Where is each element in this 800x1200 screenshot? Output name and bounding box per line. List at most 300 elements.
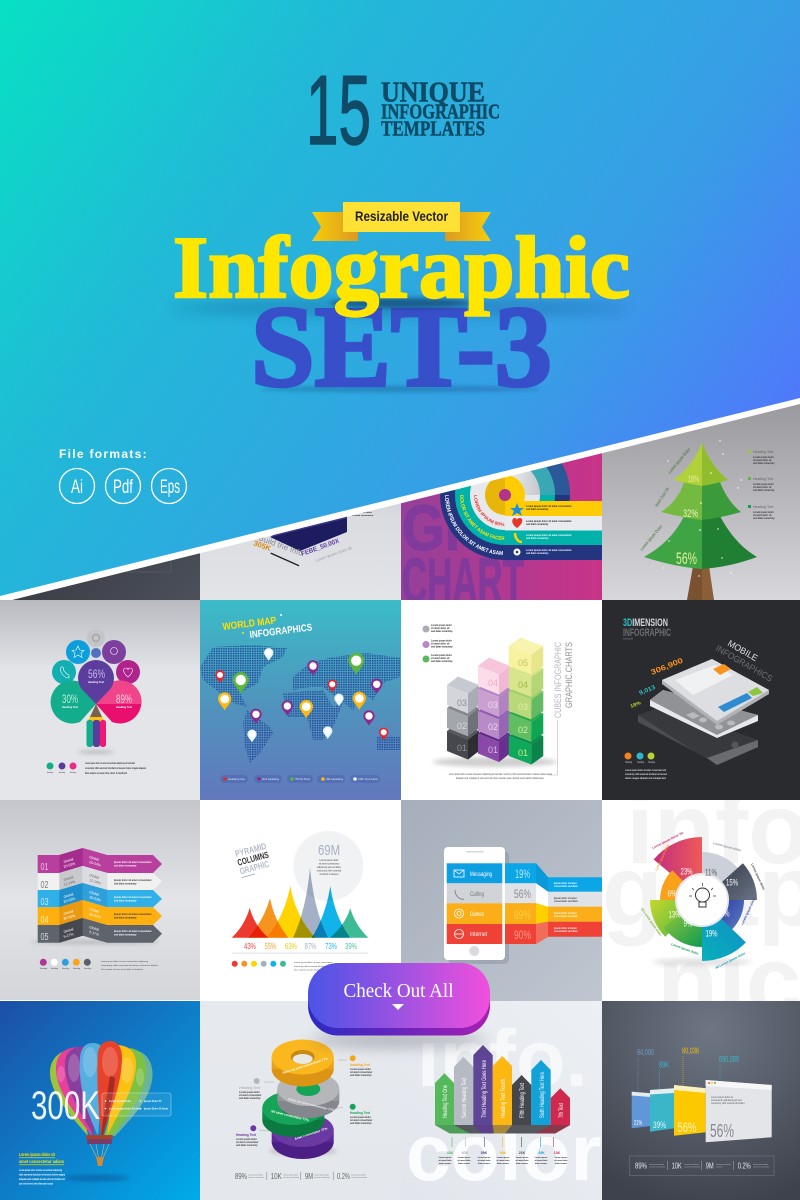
map pins <box>215 648 388 742</box>
panel: world map <box>200 600 401 800</box>
percentages: 32% <box>683 508 698 520</box>
ribbon 2 <box>38 866 162 890</box>
pyramid title: PYRAMID <box>234 841 268 859</box>
ribbon fold labels: 5-17% <box>89 930 100 937</box>
arrows <box>435 1045 570 1125</box>
highlight circle: tincidunt ut laoreet <box>320 873 339 876</box>
layers copy: dolore magna aliquam erat volutpat wisi <box>625 777 666 780</box>
map legend <box>220 775 380 783</box>
ribbon fold labels: 5-17% <box>63 932 74 939</box>
panel: folded ribbons <box>0 800 200 1000</box>
panel: arrow columns <box>401 1001 602 1200</box>
ribbon text: sed diam nonummy <box>114 864 137 868</box>
balloon copy <box>19 1169 66 1186</box>
ribbon text: sed diam nonummy <box>114 882 137 886</box>
vertical title <box>553 642 574 718</box>
headline shadow between words <box>330 298 470 308</box>
floor <box>435 1125 570 1134</box>
window percentages: 56% <box>710 1121 734 1141</box>
layer stats: 9,013 <box>639 685 657 697</box>
legend: sit amet dolor sit <box>753 486 772 489</box>
sectors <box>650 837 757 961</box>
arrow labels: Sixth Heading Text Here <box>540 1072 546 1118</box>
petal labels: 30% <box>62 692 78 706</box>
highlight circle: 69M <box>318 842 340 859</box>
cube numbers: 03 <box>457 698 467 708</box>
sector percentages: 19% <box>706 928 718 938</box>
ribbon numbers: 01 <box>40 862 49 873</box>
cube numbers: 04 <box>488 678 498 688</box>
peaks <box>232 868 368 938</box>
arrow values <box>446 1152 560 1154</box>
row text: Lorem ipsum dolor sit amet consectetur <box>526 505 572 508</box>
ribbon legend: Heading <box>51 968 58 970</box>
arrow copy: Lorem ipsum <box>535 1157 547 1159</box>
stats box: 0.2% <box>738 1160 751 1170</box>
ribbon text: sed diam nonummy <box>114 916 137 920</box>
map legend: Third Text <box>295 777 310 781</box>
ribbon captions: Ipsum dolor sit amet <box>554 912 577 915</box>
ribbon text: Ipsum dolor sit amet consectetur <box>114 861 152 864</box>
petal labels: Heading Text <box>116 705 132 709</box>
ring stats: Lorem ipsum dolor <box>314 1174 329 1176</box>
row icons <box>510 503 524 556</box>
ribbon text: sed diam nonummy <box>114 900 137 902</box>
window percentages: 21% <box>634 1120 642 1127</box>
petal labels: 89% <box>116 692 132 706</box>
mobile infographics title: INFOGRAPHICS <box>714 643 774 684</box>
ribbon 3 <box>38 883 162 907</box>
ring stats: 10K <box>271 1171 282 1181</box>
file formats: File formats: <box>59 447 148 461</box>
callouts: sed diam nonummy <box>239 1098 261 1100</box>
ribbon text: Ipsum dolor sit amet consectetur <box>114 879 152 882</box>
panel: browser windows <box>602 1001 800 1200</box>
ring stats: 0.2% <box>337 1171 350 1181</box>
ring stats: Lorem ipsum dolor <box>248 1174 263 1176</box>
menu labels: Messaging <box>470 871 492 878</box>
ribbon text: Ipsum dolor sit amet consectetur <box>114 913 152 916</box>
row text: Lorem ipsum dolor sit amet consectetur <box>526 549 572 552</box>
balloon gores <box>50 1041 153 1136</box>
badge: Eps: Eps <box>160 477 180 498</box>
pyramid copy <box>294 961 333 972</box>
top screen layer <box>662 659 769 725</box>
stats box: 10K <box>672 1160 682 1170</box>
ring captions: Dolor sit amet consectetur 77% <box>288 1097 335 1112</box>
sector labels: Lorem ipsum dolor <box>654 843 670 871</box>
sector percentages: 15% <box>726 878 738 888</box>
petal labels: Heading Text <box>88 680 104 684</box>
sector percentages: 6% <box>668 888 676 898</box>
ribbons out of phone <box>505 863 602 944</box>
gray ring <box>277 1072 339 1118</box>
ribbon captions: Ipsum dolor sit amet <box>554 897 577 900</box>
ribbon captions: consectetur sed diam <box>554 885 578 888</box>
window percentages <box>634 1119 734 1141</box>
panel: mobile layers <box>602 600 800 800</box>
arrow copy: sit amet dolor <box>438 1159 452 1162</box>
layers copy: Lorem ipsum dolor sit amet consectetur elit <box>625 769 666 772</box>
column 2 cubes <box>478 658 510 762</box>
glass info box: Lorem Ipsum Dolor <box>109 1100 131 1103</box>
vertical title: CUBES INFOGRAPHIC <box>553 642 563 718</box>
row text: Lorem ipsum dolor sit amet consectetur <box>526 534 572 537</box>
big petals <box>51 660 142 724</box>
ribbon fold labels: Global <box>89 873 100 880</box>
ribbon text <box>114 861 152 936</box>
body copy <box>85 762 146 775</box>
headline: SET-3: SET-3 <box>251 284 552 412</box>
balloon copy: nibh euismod tincidunt ut laoreet dolore magna <box>19 1174 66 1176</box>
callouts: Lorem ipsum dolor <box>239 1092 260 1094</box>
rotated tier labels <box>639 447 692 552</box>
cube numbers: 02 <box>518 725 528 735</box>
small icon circles <box>52 629 140 684</box>
ring captions <box>271 1056 335 1141</box>
300K stat: 300K <box>31 1084 100 1128</box>
ribbon text: Ipsum dolor sit amet consectetur <box>114 930 152 933</box>
ring stats: sit amet consectetur <box>283 1176 299 1179</box>
menu percentages <box>514 867 531 942</box>
layers legend <box>624 752 656 764</box>
stats box: 89% <box>635 1160 647 1170</box>
ribbon 5 <box>38 918 162 943</box>
arrow copy: Lorem ipsum <box>458 1157 470 1159</box>
ring stats: 89% <box>235 1171 247 1181</box>
purple ring <box>272 1113 334 1159</box>
arrow copy: Lorem ipsum <box>478 1157 490 1159</box>
ribbon fold labels: Global <box>89 890 100 897</box>
arc labels: LOREM IPSUM DOLOR SIT AMET ASAM <box>445 495 503 555</box>
button: check out all: Check Out All <box>344 980 454 1002</box>
arrow copy: sit amet dolor <box>554 1159 568 1162</box>
percentages: 43% <box>244 942 256 951</box>
callouts: sit amet consectetur <box>350 1119 372 1122</box>
body copy: nonummy nibh euismod tincidunt ut laoreet dolore magna aliquam <box>85 767 146 770</box>
cube numbers: 01 <box>488 745 498 755</box>
balloon highlights <box>57 1047 144 1086</box>
ribbon fold labels: Global <box>63 909 74 916</box>
ribbon copy: nonummy nibh euismod tincidunt ut laoreet dolore <box>101 964 159 967</box>
background words: CHART <box>402 545 524 617</box>
pyramid title: COLUMNS <box>236 850 270 868</box>
stat labels <box>637 1046 739 1070</box>
title: 15 unique infographic templates: UNIQUE <box>381 78 485 108</box>
ribbon fold labels: Global <box>63 892 74 899</box>
panel: dark dashboard thumbnail <box>12 553 200 600</box>
cube numbers: 01 <box>457 743 467 753</box>
petal labels <box>62 667 132 709</box>
ribbon fold labels: 80-92% <box>63 914 76 921</box>
ribbon fold labels: 20-53% <box>89 895 101 902</box>
body copy: Duis autem vel eum iriure dolor in hendrerit <box>85 772 127 775</box>
title: 15 unique infographic templates: 15 <box>306 55 371 165</box>
ribbon numbers: 05 <box>40 932 49 943</box>
rotated tier labels: Ipsum Dolor Sit <box>654 486 670 508</box>
ribbon fold labels: Global <box>63 875 74 882</box>
arrow copy: diam nonum <box>516 1163 528 1165</box>
ribbon numbers: 03 <box>40 897 49 908</box>
petal labels: 56% <box>88 667 105 681</box>
badge: Ai: Ai <box>71 477 83 498</box>
layers copy <box>625 769 667 780</box>
sector labels: Lorem ipsum dolor <box>740 897 756 925</box>
window copy: consectetur adipiscing elit sed <box>711 1099 742 1102</box>
stats box: sit amet <box>716 1166 723 1168</box>
panel: isometric box thumbnail: sit amet consectetur <box>352 514 373 517</box>
sector percentages: 9% <box>684 918 692 928</box>
ribbon fold labels: 12-19% <box>63 880 76 887</box>
highlight circle: adipiscing elit sed diam <box>317 866 341 869</box>
menu percentages: 56% <box>514 887 531 901</box>
ribbon fold labels: Global <box>89 907 100 914</box>
panel: pyramid columns <box>200 800 401 1001</box>
sector labels <box>640 830 766 970</box>
mobile infographics title: MOBILE <box>726 638 760 663</box>
callouts: sit amet consectetur <box>236 1141 258 1144</box>
ring stats: Lorem ipsum dolor <box>283 1174 298 1176</box>
ring stats: sit amet consectetur <box>351 1176 367 1179</box>
arrow values: 89K <box>481 1151 488 1155</box>
ring stats <box>235 1171 367 1181</box>
panel: isometric box thumbnail: Lorem ipsum dolor sit <box>315 545 353 563</box>
cube legend: sed diam nonummy <box>431 631 453 633</box>
keypad layer <box>650 690 758 738</box>
sector labels: Lorem Ipsum Dolor Sit <box>652 830 685 850</box>
leader lines <box>638 1056 720 1091</box>
menu percentages: 90% <box>514 928 531 942</box>
panel: phone menu <box>401 800 602 1001</box>
ring stats: sit amet consectetur <box>314 1176 330 1179</box>
cube numbers: 02 <box>457 721 467 731</box>
arrow copy <box>438 1157 568 1165</box>
cube legend <box>422 625 453 663</box>
glass info box: Ipsum Dolor 54 <box>144 1100 162 1103</box>
row text: sed diam nonummy <box>526 523 549 526</box>
percentages: 87% <box>304 942 316 951</box>
legend: Heading Text <box>753 477 773 481</box>
ribbon fold labels <box>63 855 101 939</box>
panel: sector chart <box>606 800 800 1001</box>
ribbon: resizable vector <box>312 202 491 241</box>
ribbon captions: Ipsum dolor sit amet <box>554 882 577 885</box>
rotated tier labels: Lorem Ipsum Dolor <box>667 447 692 475</box>
ribbon copy: Lorem ipsum dolor sit amet consectetur adipiscing <box>101 960 149 963</box>
stats box: sit amet consectetur <box>753 1166 769 1168</box>
background lettering <box>409 1028 600 1181</box>
legend dots <box>46 762 76 774</box>
ribbon text: sed diam nonummy <box>114 934 137 936</box>
ribbon captions: Ipsum dolor sit amet <box>554 927 577 930</box>
layers legend: Heading <box>648 762 656 764</box>
percentages: 73% <box>325 942 337 951</box>
window copy <box>711 1096 745 1105</box>
arrow copy: Lorem ipsum <box>516 1157 528 1159</box>
ring stats: 9M <box>305 1171 313 1181</box>
arrow values: 67K <box>462 1151 469 1155</box>
legend dots: Heading <box>59 772 65 774</box>
stats box: sit amet consectetur <box>649 1166 665 1168</box>
panel: hot air balloon <box>0 1001 200 1200</box>
glass info box: Lorem Ipsum Dolor Sit Amet <box>109 1108 141 1110</box>
ribbon text: Ipsum dolor sit amet consectetur <box>114 896 152 899</box>
legend: Lorem ipsum dolor <box>753 512 774 514</box>
highlight circle: Lorem ipsum dolor <box>319 859 339 862</box>
arrow labels: Second Heading Text <box>462 1078 468 1118</box>
drop lines <box>452 1137 554 1147</box>
sector percentages: 23% <box>680 866 692 876</box>
stats box: Lorem ipsum dolor <box>753 1164 768 1166</box>
cube numbers: 05 <box>518 658 528 668</box>
callouts: Heading Text <box>239 1086 260 1090</box>
arrow copy: diam nonum <box>535 1163 547 1165</box>
background lettering: info. <box>417 1014 588 1104</box>
pyramid title <box>234 841 273 878</box>
map legend: 4th Heading <box>326 777 343 781</box>
stats box: sit amet consectetur <box>684 1166 700 1168</box>
hero white divider band <box>0 396 800 603</box>
arrow copy: diam nonum <box>478 1163 490 1165</box>
cube numbers: 01 <box>518 748 528 758</box>
callouts: sed diam nonummy <box>350 1075 372 1077</box>
arrow values: 43K <box>447 1151 454 1155</box>
map title: WORLD MAP <box>222 615 277 633</box>
arrow copy: sit amet dolor <box>515 1159 529 1162</box>
cube legend: Lorem ipsum dolor <box>431 655 452 657</box>
layer stats: 18% <box>630 700 643 710</box>
arrow labels: Fifth Heading Text <box>520 1083 526 1118</box>
stats box: 9M <box>706 1160 714 1170</box>
petal labels: Heading Text <box>62 705 78 709</box>
percentages <box>676 474 699 568</box>
window percentages: 56% <box>678 1119 696 1135</box>
column 3 cubes <box>509 638 543 764</box>
pyramid copy: Duis autem vel eum iriure dolor <box>294 968 325 972</box>
ring captions: Amet consectetur 77% <box>294 1127 328 1141</box>
sector percentages: 8% <box>720 908 730 918</box>
sector labels: Lorem ipsum dolor <box>750 863 766 891</box>
sector labels: 40 Lorem ipsum dolor <box>715 951 747 970</box>
main title shadows <box>170 302 630 392</box>
stats box: Lorem ipsum dolor <box>684 1164 699 1166</box>
ribbon fold labels: 12-19% <box>89 878 101 885</box>
ribbon copy <box>101 960 159 971</box>
hero gradient background <box>0 0 800 596</box>
ribbon legend: Heading <box>84 968 91 970</box>
legend: sit amet dolor sit <box>753 459 772 462</box>
balloon burner <box>86 1135 113 1166</box>
ribbon fold labels: Global <box>89 925 100 932</box>
stat labels: 94,090 <box>637 1048 654 1057</box>
window percentages: 39% <box>653 1120 666 1130</box>
callouts: sit amet consectetur <box>239 1094 261 1097</box>
ribbon legend: Heading <box>73 968 80 970</box>
body copy: Lorem ipsum dolor sit amet consectetur adipiscing elit sed diam <box>85 762 135 765</box>
rotated tier labels: Lorem Ipsum Dolor <box>639 524 664 552</box>
layers copy: nonummy nibh euismod tincidunt ut laoreet <box>625 773 667 776</box>
panel: cubes chart <box>401 600 602 800</box>
ribbon captions: consectetur sed diam <box>554 900 578 903</box>
callouts: Heading Text <box>236 1133 257 1137</box>
arrow labels: Third Heading Text Goes Here <box>482 1060 488 1118</box>
map legend: Fifth Text Here <box>358 777 378 781</box>
ribbon legend: Heading <box>40 968 47 970</box>
ribbon captions: consectetur sed diam <box>554 930 578 933</box>
pencil <box>86 704 106 747</box>
tree tiers <box>644 443 757 569</box>
ribbon copy: Duis autem vel eum iriure dolor in hendrerit <box>101 968 143 971</box>
map title: INFOGRAPHICS <box>249 622 313 641</box>
arrow copy: sit amet dolor <box>457 1159 471 1162</box>
phone body <box>444 847 505 960</box>
arrow labels: Heading Text Fourth <box>501 1079 507 1118</box>
arrow values: 13K <box>554 1151 561 1155</box>
row text: sed diam nonummy <box>526 508 549 511</box>
ribbon captions: consectetur sed diam <box>554 915 578 918</box>
legend: Lorem ipsum dolor <box>753 484 774 486</box>
title: 15 unique infographic templates: INFOGRAPHIC <box>381 100 500 124</box>
cube numbers: 02 <box>488 722 498 732</box>
balloon heading: amet consectetur adiam <box>19 1159 64 1164</box>
title: 15 unique infographic templates <box>306 55 500 165</box>
balloon heading <box>19 1152 64 1165</box>
layers legend: Heading <box>637 762 645 764</box>
sector percentages <box>668 866 738 938</box>
callouts: Heading Text <box>350 1063 371 1067</box>
background lettering: nic <box>657 926 800 1038</box>
panel: stacked rings <box>200 1001 401 1200</box>
map legend: 2nd Heading <box>262 777 279 781</box>
phone base layer <box>638 707 758 765</box>
ring stats: Lorem ipsum dolor <box>351 1174 366 1176</box>
legend: sed diam nonummy <box>753 518 775 520</box>
ribbon fold labels: 20-53% <box>63 862 76 869</box>
ribbon fold labels: 20-53% <box>63 897 76 904</box>
arrow copy: Lorem ipsum <box>497 1157 509 1159</box>
ribbon 1 <box>38 848 162 873</box>
highlight circle <box>293 831 363 901</box>
arrow values: 45K <box>538 1151 545 1155</box>
arrow copy: Lorem ipsum <box>439 1157 451 1159</box>
background lettering: color <box>406 1108 602 1197</box>
cube numbers: 04 <box>518 680 528 690</box>
arrow labels: 7th Text <box>559 1103 565 1118</box>
legend: sit amet dolor sit <box>753 514 772 517</box>
badge: Pdf: Pdf <box>113 477 133 498</box>
arrow copy: diam nonum <box>555 1163 567 1165</box>
ribbon legend: Heading <box>62 968 69 970</box>
menu percentages: 19% <box>515 867 530 881</box>
panel: isometric box thumbnail: FEBE_50.00X <box>300 537 341 558</box>
panel: isometric box thumbnail <box>200 503 401 600</box>
cube legend: sit amet dolor sit <box>431 642 450 646</box>
balloon copy: quis nostrud exerci tation ullamcorper suscipit <box>19 1182 53 1186</box>
snow <box>662 440 742 577</box>
callouts: Lorem ipsum dolor <box>350 1117 371 1119</box>
arrow labels <box>443 1060 565 1118</box>
background lettering <box>606 800 800 1001</box>
arrow copy: sit amet dolor <box>496 1159 510 1162</box>
background words: GRA <box>402 492 524 564</box>
callouts <box>236 1055 372 1147</box>
menu labels: Games <box>470 911 484 918</box>
map legend: Heading One <box>228 777 245 781</box>
headline: Infographic: Infographic <box>173 220 630 317</box>
vertical title: GRAPHIC.CHARTS <box>564 642 574 708</box>
panel: pencil tree petals <box>0 600 200 800</box>
ribbon fold labels: Global <box>63 927 74 934</box>
